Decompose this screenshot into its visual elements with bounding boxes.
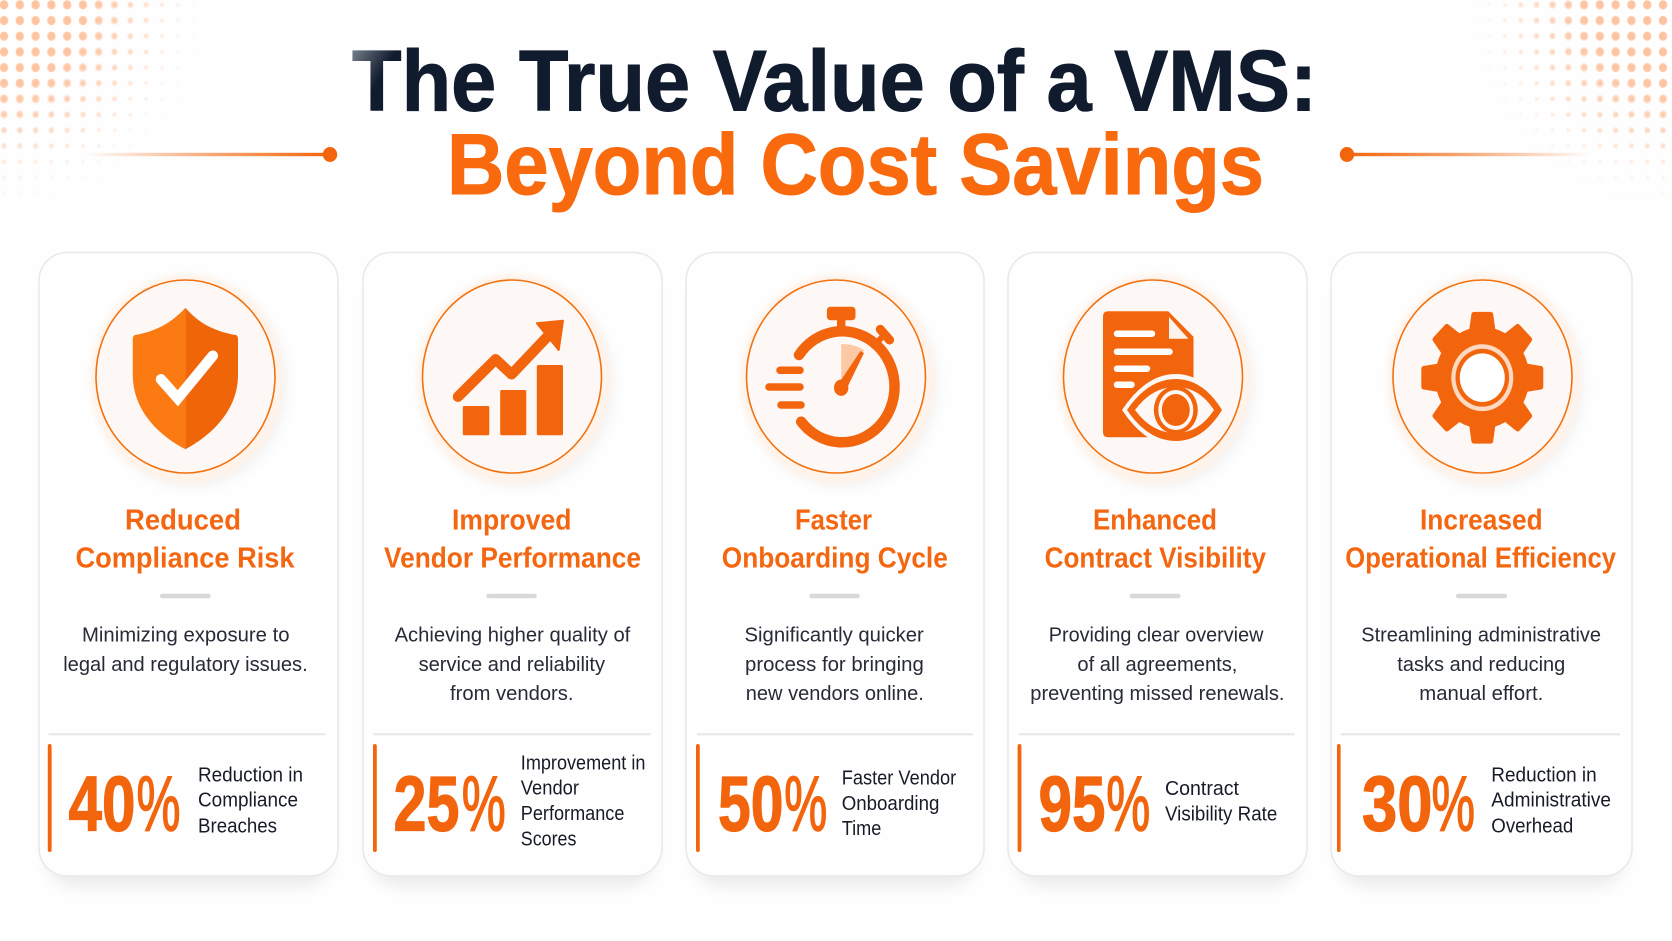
stat label: Scores [521,828,576,850]
dot pattern: top right [1488,0,1668,180]
title [352,34,1317,213]
stat value: % [462,760,506,848]
stat accent bar [1337,744,1341,852]
dot pattern: top left [0,0,180,180]
stat label: Breaches [198,815,277,837]
stat label [1165,778,1277,826]
stat label [1491,765,1611,837]
stat value: 50 [718,760,784,848]
description: manual effort. [1419,682,1543,705]
stat divider [1018,733,1294,735]
title: The True Value of a VMS: [352,34,1317,130]
card heading: Faster [795,504,872,536]
panel: increased operational efficiency [1331,252,1632,886]
stat divider [697,733,973,735]
icon: shield with check [90,274,285,485]
stat value: % [784,760,827,848]
description: legal and regulatory issues. [63,653,308,676]
stat value: % [1432,760,1475,848]
small divider [1456,594,1507,598]
description: Providing clear overview [1049,624,1264,647]
description: process for bringing [745,653,924,676]
stat label: Performance [521,803,624,825]
description [1361,624,1601,705]
stat value: 25 [394,760,460,848]
card heading: Contract Visibility [1045,542,1266,574]
stat accent bar [373,744,377,852]
description: service and reliability [419,653,606,676]
icon: rising bar chart [416,274,612,485]
stat label [198,765,303,837]
stat label: Compliance [198,790,298,812]
small divider [809,594,860,598]
card heading: Onboarding Cycle [722,542,948,574]
icon: stopwatch [740,274,936,485]
stat label [842,767,957,840]
stat label [521,752,645,850]
stat accent bar [696,744,700,852]
icon: gear [1387,274,1582,485]
small divider [160,594,211,598]
description [63,624,308,676]
stat value: 40 [68,760,136,848]
stat value: 30 [1362,760,1432,848]
small divider [486,594,537,598]
description: tasks and reducing [1397,653,1565,676]
card heading [384,504,641,574]
description: new vendors online. [746,682,924,705]
stat accent bar [48,744,52,852]
card heading: Improved [452,504,572,536]
stat accent bar [1018,744,1021,852]
stat label: Reduction in [1491,765,1597,787]
stat label: Reduction in [198,765,303,787]
card heading: Operational Efficiency [1345,542,1616,574]
description [1030,624,1284,705]
stat label: Vendor [521,778,579,800]
decorative line: left [85,147,337,162]
title: Beyond Cost Savings [447,117,1264,213]
stat value: 95 [1038,760,1106,848]
description: Achieving higher quality of [395,624,631,647]
card heading: Compliance Risk [76,542,295,574]
description: Minimizing exposure to [82,624,290,647]
stat value: % [1106,760,1150,848]
panel: improved vendor performance [363,252,662,886]
stat divider [1341,733,1620,735]
description: preventing missed renewals. [1030,682,1284,705]
icon: document with eye [1058,274,1252,485]
decorative line: right [1340,147,1592,162]
small divider [1130,594,1180,598]
description: Significantly quicker [744,624,924,647]
stat label: Improvement in [521,752,645,774]
description [395,624,631,705]
card heading: Vendor Performance [384,542,641,574]
card heading: Enhanced [1093,504,1217,536]
stat label: Faster Vendor [842,767,957,789]
stat divider [49,733,326,735]
stat label: Time [842,818,881,840]
card heading: Reduced [125,504,241,536]
card heading [1045,504,1266,574]
card heading [722,504,948,574]
description [744,624,924,705]
stat label: Visibility Rate [1165,804,1277,826]
panel: faster onboarding cycle [686,252,984,886]
panel: reduced compliance risk [39,252,338,886]
card heading: Increased [1420,504,1543,536]
stat label: Overhead [1491,815,1573,837]
card heading [76,504,295,574]
stat value: % [136,760,180,848]
stat label: Contract [1165,778,1239,800]
stat label: Administrative [1491,790,1611,812]
card heading [1345,504,1616,574]
description: from vendors. [450,682,574,705]
description: Streamlining administrative [1361,624,1601,647]
stat divider [374,733,650,735]
description: of all agreements, [1077,653,1237,676]
stat label: Onboarding [842,793,939,815]
panel: enhanced contract visibility [1008,252,1307,886]
